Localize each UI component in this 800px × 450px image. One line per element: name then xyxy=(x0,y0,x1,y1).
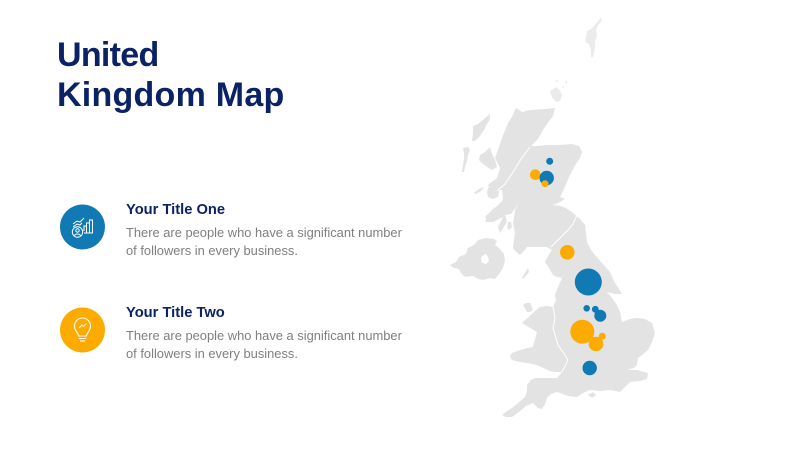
Inner Hebrides xyxy=(474,187,484,194)
Shetland xyxy=(585,17,602,57)
item two description: There are people who have a significant number xyxy=(126,328,402,343)
Isle of Wight xyxy=(588,392,596,398)
title: Kingdom Map xyxy=(57,76,285,114)
Wales xyxy=(510,307,568,372)
item one description xyxy=(126,225,402,258)
Isle of Skye xyxy=(479,147,497,170)
Anglesey xyxy=(523,303,533,312)
icon: light bulb badge xyxy=(60,308,105,352)
internal borders xyxy=(497,147,577,372)
title xyxy=(57,36,285,114)
item one description: of followers in every business. xyxy=(126,243,298,258)
title: United xyxy=(57,36,159,74)
bubbles: England xyxy=(560,245,606,375)
item two description: of followers in every business. xyxy=(126,346,298,361)
Scottish lowlands xyxy=(513,205,587,255)
item two description xyxy=(126,328,402,361)
UK map xyxy=(450,108,655,417)
item one description: There are people who have a significant number xyxy=(126,225,402,240)
item two: title and description xyxy=(126,305,402,361)
Orkney xyxy=(550,80,567,102)
item one heading: Your Title One xyxy=(126,202,225,218)
icon: growth chart badge xyxy=(60,204,105,250)
Northern Ireland xyxy=(450,238,505,280)
Outer Hebrides xyxy=(472,114,490,141)
bubbles: Scotland xyxy=(530,158,554,187)
Isle of Man xyxy=(522,268,529,279)
Lough Neagh xyxy=(481,254,489,264)
item one: title and description xyxy=(126,202,402,258)
item two heading: Your Title Two xyxy=(126,305,225,321)
Great Britain mainland xyxy=(485,108,655,417)
